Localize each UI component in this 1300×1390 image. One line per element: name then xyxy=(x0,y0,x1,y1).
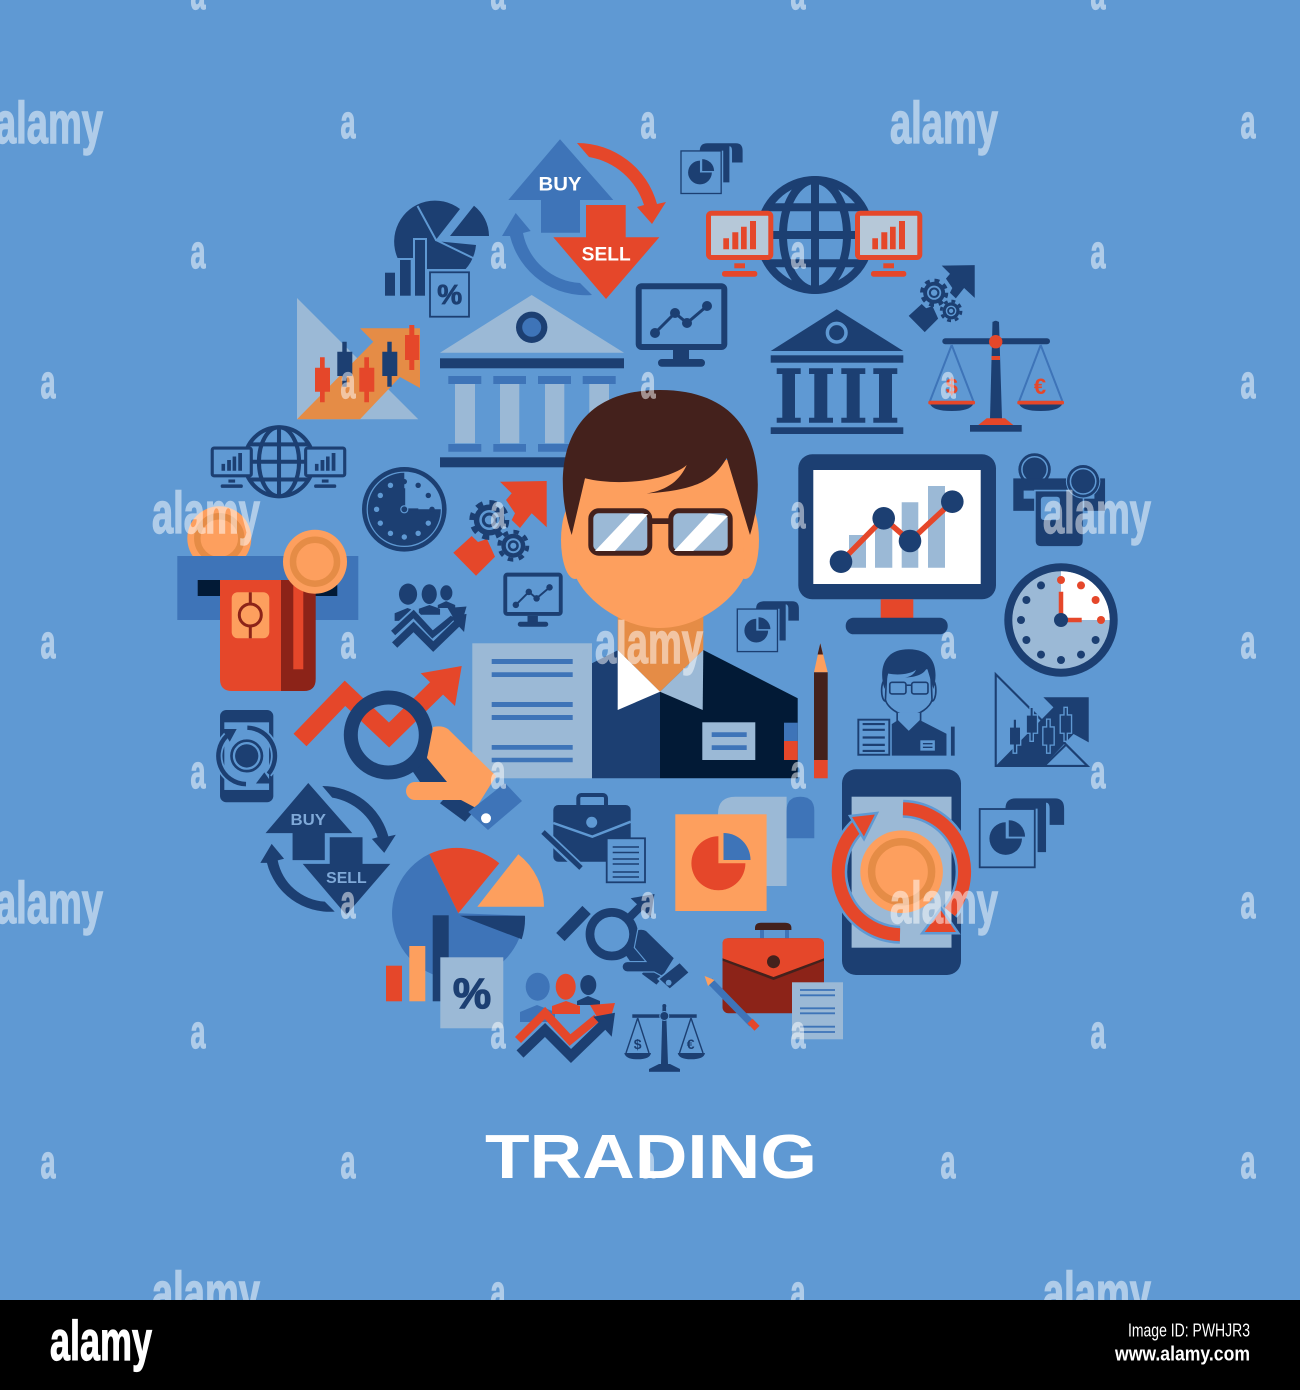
icon: gears with navy arrow xyxy=(909,265,975,332)
watermark overlay: alamy xyxy=(1043,481,1151,546)
icon: buy and sell arrows with cycle: SELL xyxy=(582,245,631,266)
icon: navy bank building xyxy=(771,309,903,434)
icon: navy document with pie chart (centre) xyxy=(737,601,799,652)
watermark overlay: a xyxy=(940,355,956,408)
watermark overlay: a xyxy=(790,225,806,278)
icon: navy buy and sell arrows xyxy=(260,783,396,915)
watermark overlay: a xyxy=(40,1135,56,1188)
icon: navy buy and sell arrows: BUY xyxy=(291,812,327,829)
icon: trader with glasses, suit and pencil xyxy=(561,390,828,778)
watermark overlay: a xyxy=(640,95,656,148)
watermark overlay: a xyxy=(1240,95,1256,148)
icon: coloured pie chart with bars and percent: % xyxy=(453,970,491,1018)
icon: small navy trader xyxy=(858,649,955,756)
watermark overlay: a xyxy=(640,875,656,928)
watermark overlay: a xyxy=(490,745,506,798)
icon: small globe with navy monitors xyxy=(212,427,345,496)
icon: small phone with cycle arrows xyxy=(218,710,275,802)
icon: navy pie chart with bars and percent xyxy=(380,201,489,317)
watermark overlay: a xyxy=(190,745,206,798)
watermark overlay: a xyxy=(940,615,956,668)
footer bar: www.alamy.com xyxy=(1114,1344,1250,1366)
icon: buy and sell arrows with cycle: BUY xyxy=(538,174,582,196)
watermark overlay: alamy xyxy=(1043,1261,1151,1326)
watermark overlay: a xyxy=(340,1135,356,1188)
footer bar: Image ID: PWHJR3 xyxy=(1128,1321,1250,1341)
watermark overlay: a xyxy=(490,225,506,278)
watermark overlay: alamy xyxy=(890,91,998,156)
watermark overlay: a xyxy=(790,745,806,798)
watermark overlay: a xyxy=(1240,615,1256,668)
icon: hand with magnifier over red arrow xyxy=(300,666,522,830)
pencil xyxy=(814,643,828,778)
icon: navy pie chart with bars and percent: % xyxy=(437,279,462,310)
watermark overlay: a xyxy=(340,875,356,928)
watermark overlay: alamy xyxy=(152,481,260,546)
watermark overlay: a xyxy=(340,355,356,408)
watermark overlay: a xyxy=(1090,1005,1106,1058)
watermark overlay: a xyxy=(640,1135,656,1188)
icon: buy and sell arrows with cycle xyxy=(502,139,666,299)
watermark overlay: a xyxy=(490,1005,506,1058)
icon: large monitor with bar and line chart xyxy=(798,454,996,634)
icon: large balance scale xyxy=(928,321,1064,432)
watermark overlay: a xyxy=(1090,225,1106,278)
icon: navy document with pie chart (right) xyxy=(980,798,1064,867)
icon: small monitor with line chart xyxy=(505,575,561,627)
watermark overlay: a xyxy=(1240,1135,1256,1188)
watermark overlay: alamy xyxy=(595,611,703,676)
icon: navy document with pie chart (top) xyxy=(681,143,743,193)
icon: small navy balance scale xyxy=(624,1004,705,1072)
icon: large balance scale: $ xyxy=(946,374,958,399)
icon: people with rising zigzag (navy) xyxy=(393,584,467,647)
icon: light bank building xyxy=(440,295,624,467)
icon: small navy balance scale: € xyxy=(687,1036,695,1052)
watermark overlay: a xyxy=(340,615,356,668)
icon: candlestick chart with orange arrow xyxy=(297,298,420,419)
icon: navy hand with magnifier xyxy=(560,894,690,989)
watermark overlay: a xyxy=(1090,745,1106,798)
icon: navy monitor with line chart xyxy=(639,286,724,367)
watermark overlay: alamy xyxy=(152,1261,260,1326)
icon: navy buy and sell arrows: SELL xyxy=(326,870,367,887)
watermark overlay: alamy xyxy=(890,871,998,936)
title: TRADING xyxy=(485,1123,817,1192)
icon: bank card in slot with coins xyxy=(177,506,358,691)
icon: phone with coin and red cycle arrows xyxy=(838,769,965,975)
trader head xyxy=(561,390,759,628)
watermark overlay: a xyxy=(190,225,206,278)
watermark overlay: a xyxy=(640,355,656,408)
footer bar xyxy=(0,1300,1300,1390)
icon: red briefcase with pencil and document xyxy=(705,923,843,1039)
watermark overlay: a xyxy=(340,95,356,148)
watermark overlay: a xyxy=(490,485,506,538)
trader torso xyxy=(592,610,798,778)
watermark overlay: a xyxy=(1240,355,1256,408)
icon: clock with white quarter xyxy=(1008,567,1114,673)
watermark overlay: a xyxy=(40,615,56,668)
icon: navy bank card with coins xyxy=(1013,453,1105,547)
watermark overlay: a xyxy=(190,1005,206,1058)
icon: navy clock xyxy=(364,469,444,549)
watermark overlay: a xyxy=(940,1135,956,1188)
icon: red gears with arrow xyxy=(453,481,547,576)
watermark overlay: a xyxy=(790,1005,806,1058)
footer bar: alamy xyxy=(50,1309,152,1372)
icon: navy candlestick chart with arrow xyxy=(996,674,1089,766)
watermark overlay: a xyxy=(40,355,56,408)
watermark overlay: a xyxy=(490,1265,506,1318)
icon: navy briefcase with pencil and document xyxy=(542,795,645,882)
icon: globe with two red monitors xyxy=(708,180,920,290)
icon: orange document with pie chart xyxy=(675,797,814,911)
icon: document sheet xyxy=(472,643,592,778)
watermark overlay: a xyxy=(790,1265,806,1318)
watermark overlay: a xyxy=(790,485,806,538)
watermark overlay: a xyxy=(1240,875,1256,928)
icon: coloured people with rising zigzag xyxy=(518,973,615,1056)
icon: large balance scale: € xyxy=(1034,374,1046,399)
icon: small navy balance scale: $ xyxy=(634,1036,642,1052)
icon: coloured pie chart with bars and percent xyxy=(386,848,544,1028)
